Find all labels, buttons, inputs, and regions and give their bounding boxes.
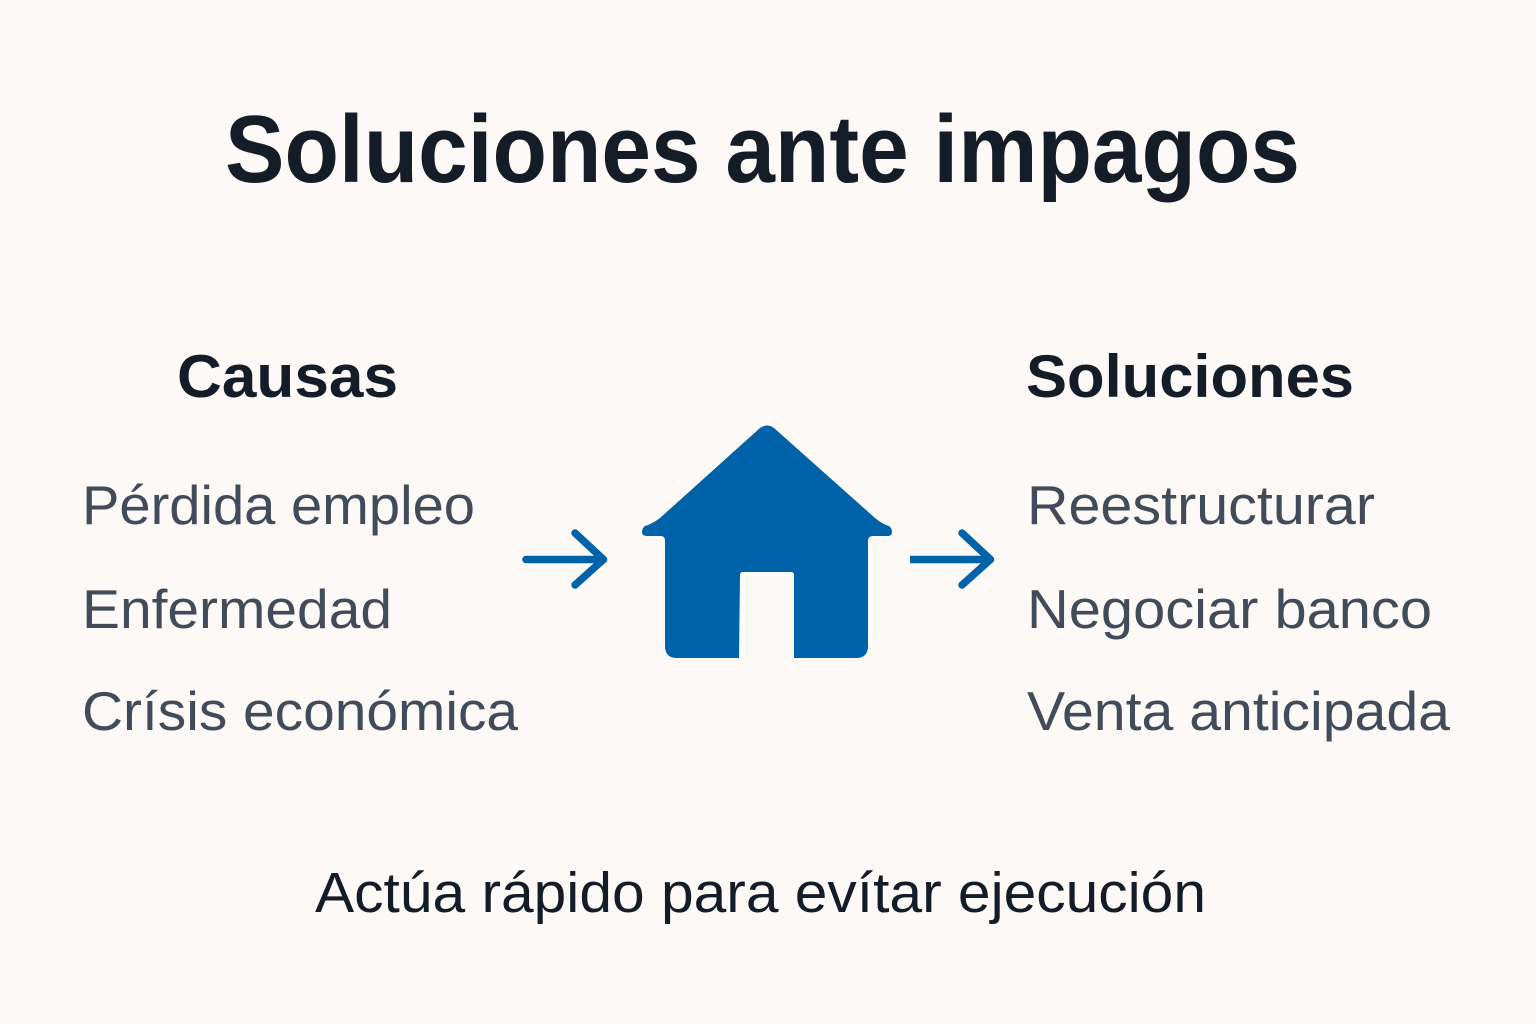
footer message: Actúa rápido para evítar ejecución [315,861,1206,925]
title: Soluciones ante impagos [225,96,1300,203]
solution: early sale: Venta anticipada [1027,680,1450,742]
cause: job loss: Pérdida empleo [82,474,475,536]
heading: soluciones: Soluciones [1026,343,1354,410]
cause: illness: Enfermedad [82,578,392,640]
arrow: causes to house [526,533,604,585]
icon: house [642,426,892,658]
panel: causes [82,343,518,742]
arrow: house to solutions [910,533,990,585]
solution: negotiate with bank: Negociar banco [1027,578,1432,640]
panel: solutions [1026,343,1450,742]
cause: economic crisis: Crísis económica [82,680,518,742]
heading: causas: Causas [177,343,398,410]
solution: restructure: Reestructurar [1027,474,1375,536]
